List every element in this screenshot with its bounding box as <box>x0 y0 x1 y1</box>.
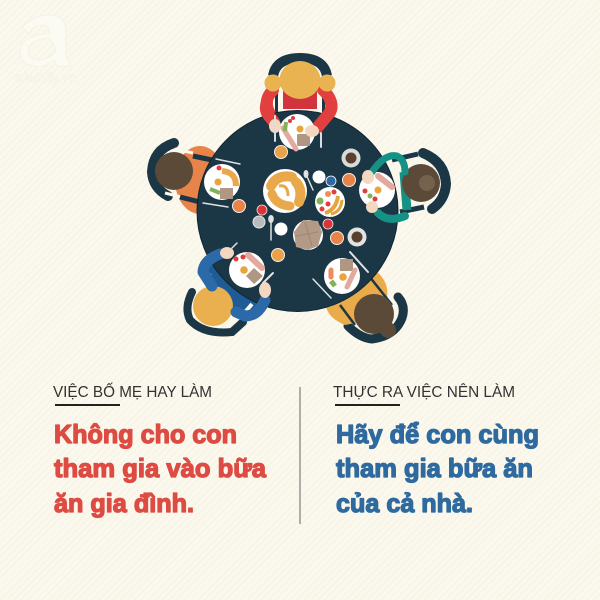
text block: left red statement <box>54 419 267 518</box>
plate: bottom-right <box>324 258 360 294</box>
text block: right blue statement: Hãy để con cùng <box>336 419 539 449</box>
text block: left red statement: ăn gia đình. <box>54 488 194 518</box>
text block: left red statement: Không cho con <box>54 419 237 449</box>
person: bottom-right, mustard shirt <box>326 268 403 339</box>
text block: left red statement: tham gia vào bữa <box>54 453 267 483</box>
logo: afamily watermark <box>15 15 77 85</box>
cutlery: table <box>203 159 368 298</box>
cups: orange <box>232 146 356 262</box>
plate: croissants <box>263 169 307 213</box>
plate: salad and bananas <box>315 187 345 217</box>
person arms over table: top <box>266 102 332 128</box>
divider <box>299 387 301 524</box>
spoons: bowls <box>268 170 308 223</box>
small bowls <box>253 170 336 236</box>
cups: coffee <box>342 148 366 246</box>
underline: right <box>335 404 400 406</box>
plate: bread <box>293 220 323 250</box>
person: bottom-left, blue shirt <box>187 255 265 332</box>
person: top, red shirt <box>264 58 336 128</box>
person: right, teal shirt <box>392 153 446 212</box>
table <box>197 110 398 312</box>
text block: right blue statement: tham gia bữa ăn <box>336 453 533 483</box>
plate: top <box>279 114 315 150</box>
text block: right blue statement <box>336 419 539 518</box>
plate: bottom-left <box>229 252 265 288</box>
text block: right blue statement: của cả nhà. <box>336 488 473 518</box>
plate: left <box>204 164 240 200</box>
underline: left <box>55 404 120 406</box>
hands and arms: bottom-left <box>203 247 271 316</box>
heading: left: VIỆC BỐ MẸ HAY LÀM <box>53 381 212 401</box>
hands and arms: right <box>362 156 405 219</box>
hands: top <box>269 119 319 137</box>
logo: afamily watermark: afamily.vn <box>15 70 77 85</box>
person: left, orange shirt <box>152 143 225 214</box>
cutlery: top <box>275 116 321 147</box>
heading: right: THỰC RA VIỆC NÊN LÀM <box>333 382 515 401</box>
plate: right <box>359 172 395 208</box>
